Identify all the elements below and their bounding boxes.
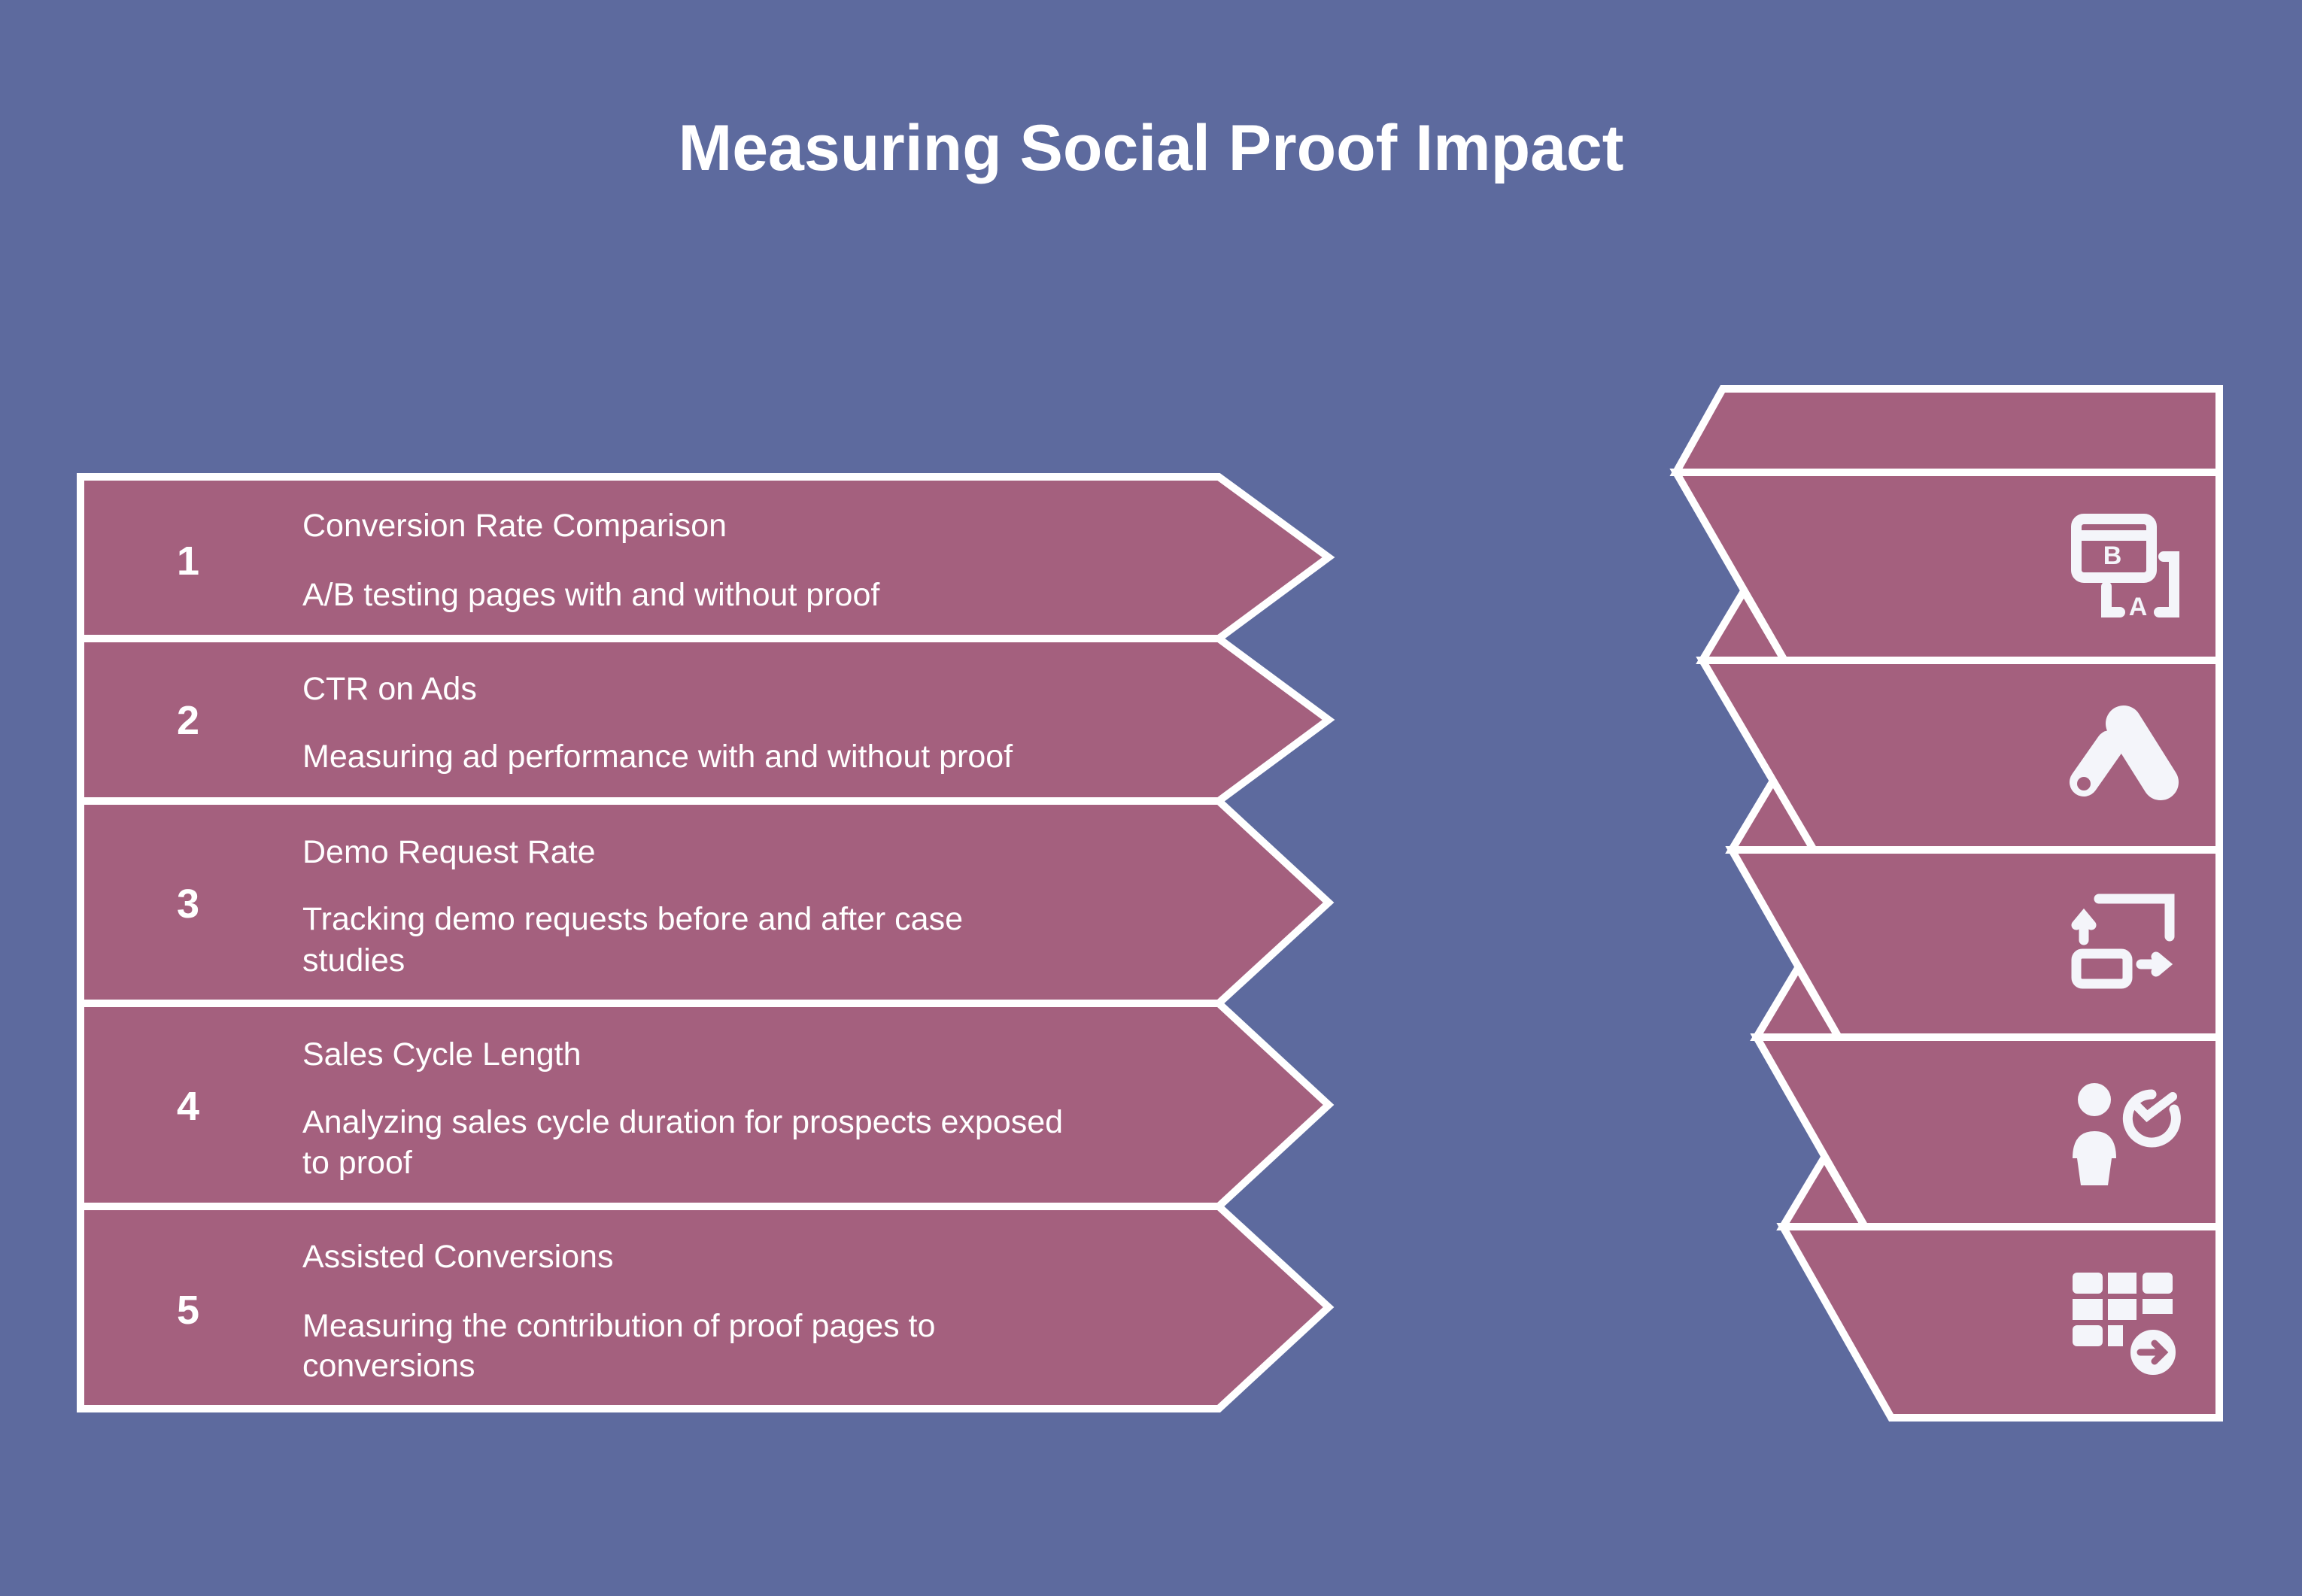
row 5 arrow: conversions: [302, 1348, 475, 1384]
row 4 arrow: [80, 1003, 1329, 1206]
row 1 arrow: 1: [177, 539, 199, 584]
icon: A/B test: B: [2103, 542, 2121, 570]
top cap band: [1676, 389, 2219, 472]
icon: ads: [2077, 724, 2161, 790]
row 2 arrow: CTR on Ads: [302, 671, 477, 707]
row 1 arrow: Conversion Rate Comparison: [302, 508, 727, 544]
row 4 arrow: Analyzing sales cycle duration for prospects exposed: [302, 1104, 1063, 1140]
icon: A/B test: A: [2129, 593, 2147, 621]
band 5: [1783, 1227, 2219, 1418]
row 4 arrow: 4: [177, 1084, 199, 1129]
row 3 arrow: [80, 801, 1329, 1003]
band 1: [1676, 472, 2219, 660]
row 5 arrow: 5: [177, 1288, 199, 1333]
icon: sales person check: [2073, 1083, 2176, 1185]
row 5 arrow: Measuring the contribution of proof pages to: [302, 1308, 935, 1344]
row 5 arrow: Assisted Conversions: [302, 1239, 613, 1275]
row 4 arrow: Sales Cycle Length: [302, 1036, 581, 1073]
row 2 arrow: 2: [177, 698, 199, 743]
icon: demo request: [2076, 899, 2170, 984]
row 1 arrow: [80, 477, 1329, 639]
band 4: [1757, 1037, 2219, 1227]
title: Measuring Social Proof Impact: [679, 112, 1623, 184]
row 1 arrow: A/B testing pages with and without proof: [302, 577, 880, 613]
row 3 arrow: 3: [177, 881, 199, 927]
row 2 arrow: [80, 639, 1329, 801]
row 4 arrow: to proof: [302, 1145, 413, 1181]
band 2: [1702, 660, 2219, 850]
panel: list of metrics: [80, 477, 1329, 1409]
panel: stacked icon bands: [1676, 389, 2219, 1418]
row 5 arrow: [80, 1206, 1329, 1409]
row 3 arrow: studies: [302, 942, 405, 979]
connector triangles: [1702, 591, 1784, 660]
icon: A/B test: [2076, 519, 2174, 621]
row 2 arrow: Measuring ad performance with and without proof: [302, 739, 1013, 775]
icon: conversion table: [2073, 1273, 2178, 1377]
band 3: [1732, 850, 2219, 1037]
row 3 arrow: Tracking demo requests before and after case: [302, 901, 963, 937]
row 3 arrow: Demo Request Rate: [302, 834, 596, 870]
